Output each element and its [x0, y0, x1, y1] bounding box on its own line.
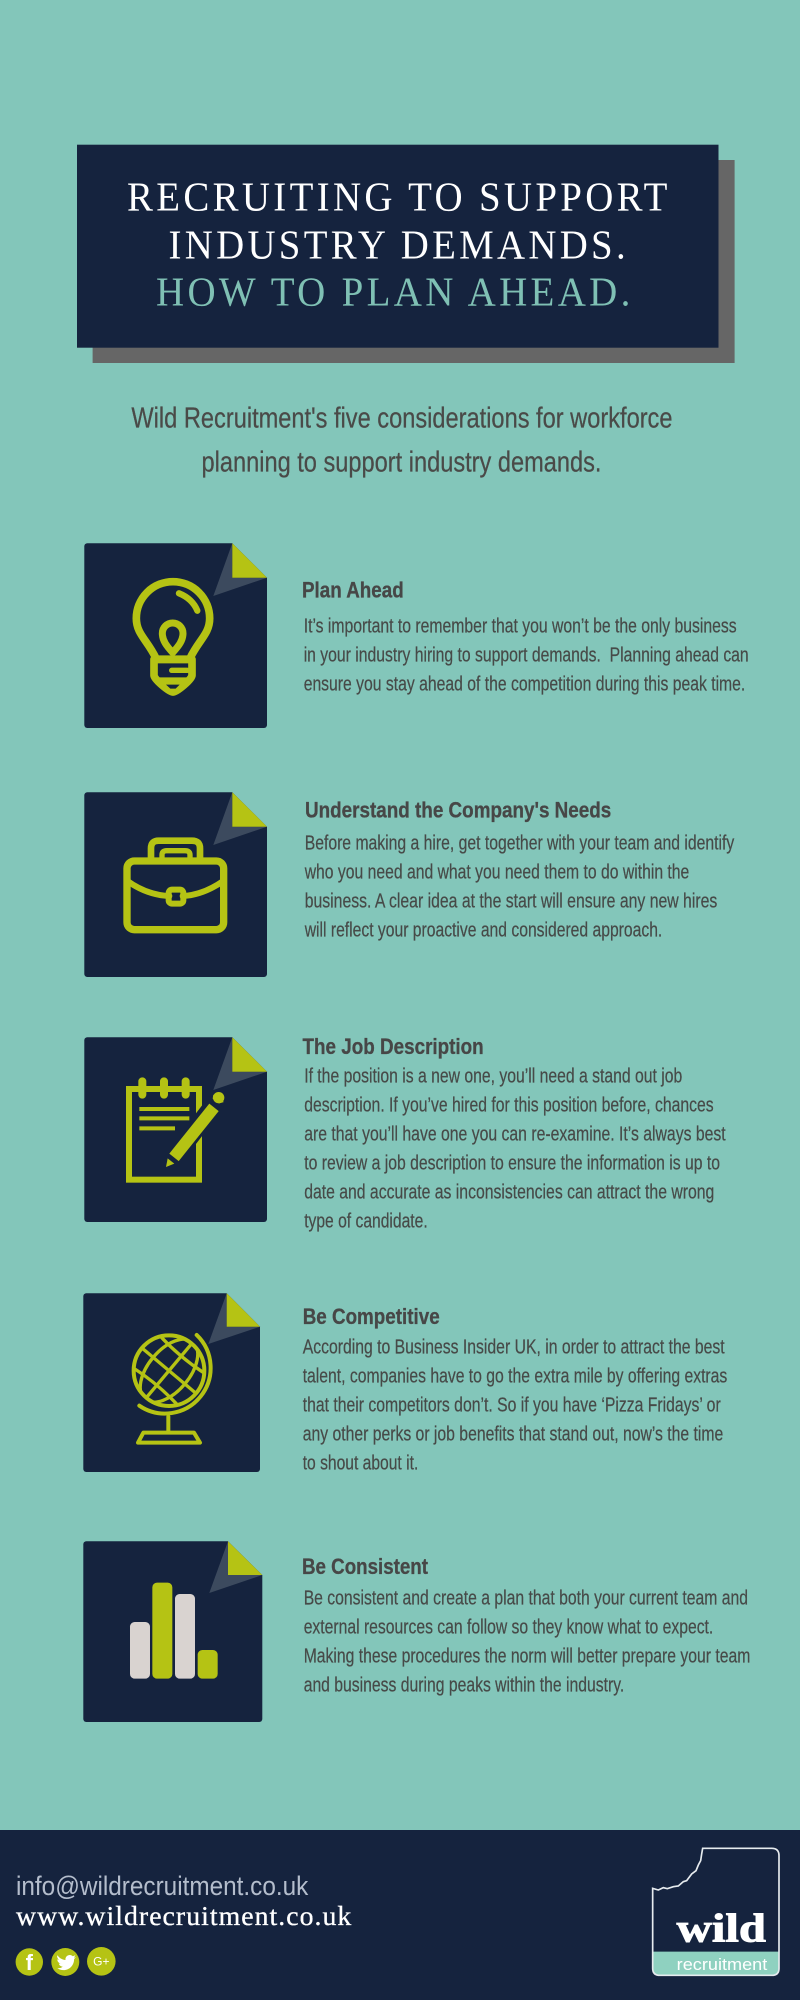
intro text [131, 403, 672, 479]
title heading: INDUSTRY DEMANDS. [168, 221, 629, 267]
panel: plan ahead [84, 543, 749, 728]
panel: the job description [84, 1034, 726, 1232]
icon: google plus [87, 1947, 116, 1976]
heading: plan ahead: Plan Ahead [302, 578, 404, 603]
title banner [77, 145, 735, 363]
title heading: RECRUITING TO SUPPORT [127, 174, 671, 220]
panel: be consistent [83, 1541, 750, 1722]
panel: understand the company's needs [84, 792, 734, 977]
body text: be consistent [304, 1587, 750, 1696]
body text: understand the company's needs [304, 832, 734, 941]
body text: be consistent: and business during peaks within the industry. [304, 1674, 624, 1696]
heading: be competitive: Be Competitive [303, 1304, 440, 1329]
icon card: bar chart [83, 1541, 262, 1722]
panel: be competitive [83, 1293, 727, 1474]
body text: the job description [304, 1065, 726, 1232]
body text: be competitive [303, 1336, 727, 1474]
title heading [127, 174, 671, 315]
icon card: globe [83, 1293, 260, 1472]
heading: understand the company's needs: Understand the Company's Needs [305, 798, 611, 823]
logo: wild recruitment: recruitment [677, 1955, 768, 1974]
logo: wild recruitment: wild [677, 1906, 766, 1951]
footer [0, 1830, 800, 2000]
intro text: planning to support industry demands. [202, 447, 602, 479]
icon: facebook [16, 1948, 43, 1976]
body text: the job description: type of candidate. [304, 1210, 428, 1232]
icon card: briefcase [84, 792, 267, 977]
title heading: HOW TO PLAN AHEAD. [156, 269, 634, 315]
email address: info@wildrecruitment.co.uk [16, 1871, 309, 1901]
body text: the job description: If the position is a new one, you’ll need a stand out job [304, 1065, 682, 1087]
body text: be competitive: to shout about it. [303, 1452, 418, 1474]
body text: understand the company's needs: will reflect your proactive and considered approach. [304, 919, 662, 941]
heading: be consistent: Be Consistent [302, 1554, 428, 1579]
heading: the job description: The Job Description [302, 1034, 484, 1059]
logo: wild recruitment [653, 1848, 779, 1975]
website address: www.wildrecruitment.co.uk [16, 1901, 352, 1931]
body text: plan ahead [304, 615, 749, 695]
icon: facebook: f [26, 1950, 34, 1975]
icon card: light bulb [84, 543, 267, 728]
icon: twitter [51, 1948, 79, 1976]
intro text: Wild Recruitment's five considerations for workforce [131, 403, 672, 435]
icon: google plus: G+ [93, 1954, 109, 1968]
body text: understand the company's needs: who you need and what you need them to do within the [304, 861, 689, 883]
icon card: notepad and pencil [84, 1037, 267, 1222]
